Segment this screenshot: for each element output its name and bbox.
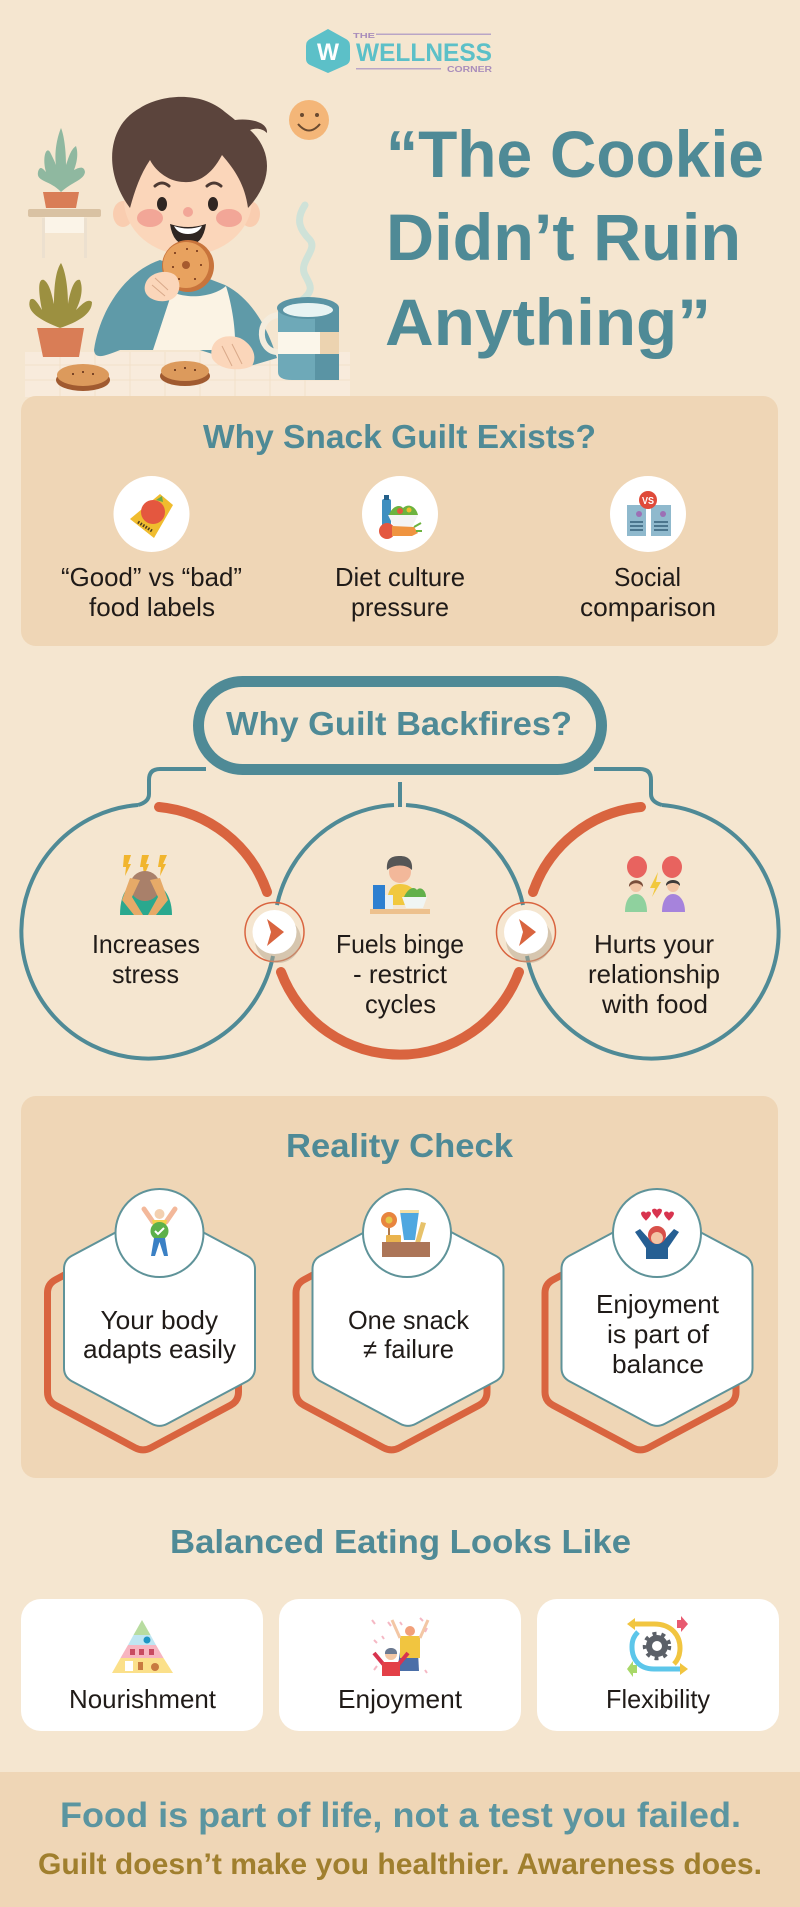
card: flexibility	[537, 1599, 779, 1731]
text: adapts easily	[83, 1334, 236, 1364]
text: hurts your relationship: Hurts your	[594, 929, 714, 959]
text: One snack	[348, 1305, 470, 1335]
logo: The Wellness Corner: WELLNESS	[356, 39, 492, 67]
potted plant	[29, 263, 92, 357]
mug with steam	[262, 205, 339, 380]
footer subline: Guilt doesn’t make you healthier. Awareness does.	[38, 1848, 762, 1881]
logo: The Wellness Corner: CORNER	[447, 65, 492, 74]
icon: arguing couple	[625, 856, 685, 912]
apron front	[153, 286, 235, 350]
shelf with plant	[28, 128, 101, 258]
text: Enjoyment	[596, 1289, 720, 1319]
orange arcs	[159, 807, 641, 1055]
text: Enjoyment	[338, 1684, 463, 1714]
text: hurts your relationship: relationship	[588, 959, 720, 989]
card: one snack	[296, 1189, 504, 1450]
heading: Reality Check	[286, 1127, 514, 1164]
arrow button	[245, 902, 304, 963]
teal circle arcs	[21, 805, 779, 1059]
section: why guilt backfires	[21, 682, 779, 1059]
card: enjoyment	[279, 1599, 521, 1731]
connectors	[138, 769, 662, 807]
title: Anything”	[385, 285, 711, 359]
card: enjoyment is part of balance	[545, 1189, 752, 1450]
logo: The Wellness Corner: THE	[353, 33, 376, 40]
icon: food label	[114, 476, 190, 552]
text: increases stress	[92, 929, 200, 989]
text: fuels binge-restrict cycles: cycles	[365, 989, 436, 1019]
text: is part of	[607, 1319, 710, 1349]
heading: balanced eating: Balanced Eating Looks Like	[170, 1523, 631, 1560]
shirt	[94, 260, 277, 366]
icon: stress	[120, 855, 172, 915]
text: fuels binge-restrict cycles	[336, 929, 464, 1019]
icon: versus comparison: VS	[642, 496, 654, 507]
icon: celebrating people	[372, 1618, 428, 1676]
text: hurts your relationship	[588, 929, 720, 1019]
text: Flexibility	[606, 1684, 710, 1714]
text: Nourishment	[69, 1684, 217, 1714]
heading: Why Snack Guilt Exists?	[203, 418, 596, 455]
logo: The Wellness Corner	[306, 29, 492, 74]
text: increases stress: Increases	[92, 929, 200, 959]
arrow button	[496, 902, 556, 963]
icon: stretching person	[144, 1209, 175, 1256]
icon: gear with arrows	[627, 1616, 688, 1677]
card: nourishment	[21, 1599, 263, 1731]
label	[335, 562, 465, 622]
face	[113, 145, 260, 255]
label: Social	[614, 562, 681, 592]
footer headline: Food is part of life, not a test you failed.	[60, 1796, 741, 1835]
icon: smiley	[289, 100, 329, 140]
logo: The Wellness Corner: W	[317, 39, 339, 66]
label	[580, 562, 716, 622]
text: balance	[612, 1349, 704, 1379]
icon: versus comparison	[610, 476, 686, 552]
title: Didn’t Ruin	[386, 200, 741, 274]
text: hurts your relationship: with food	[601, 989, 708, 1019]
text: ≠ failure	[363, 1334, 454, 1364]
label: food labels	[89, 592, 215, 622]
table	[25, 352, 350, 397]
title: “The Cookie	[386, 117, 764, 191]
text: fuels binge-restrict cycles: Fuels binge	[336, 929, 464, 959]
icon: food pyramid	[112, 1620, 173, 1673]
label: pressure	[351, 592, 449, 622]
icon: person with food	[370, 856, 430, 914]
icon: person with hearts	[635, 1209, 679, 1259]
cookies on table	[56, 361, 210, 391]
icon: healthy food	[362, 476, 438, 552]
panel: reality check	[21, 1096, 778, 1478]
hair	[112, 97, 267, 208]
icon: snack box	[381, 1210, 430, 1257]
text	[348, 1305, 470, 1364]
text: increases stress: stress	[112, 959, 179, 989]
panel: why snack guilt exists	[21, 396, 778, 646]
label: “Good” vs “bad”	[61, 562, 242, 592]
text: Your body	[100, 1305, 218, 1335]
label: comparison	[580, 592, 716, 622]
text	[83, 1305, 236, 1364]
heading pill	[198, 682, 602, 770]
label	[61, 562, 242, 622]
cookie	[162, 240, 214, 292]
illustration: boy eating a cookie	[25, 97, 350, 397]
footer banner	[0, 1772, 800, 1907]
card: your body adapts	[48, 1189, 255, 1450]
hands	[145, 272, 254, 369]
text: fuels binge-restrict cycles: - restrict	[353, 959, 448, 989]
title	[385, 117, 764, 359]
heading pill: Why Guilt Backfires?	[226, 705, 572, 742]
label: Diet culture	[335, 562, 465, 592]
text	[596, 1289, 720, 1379]
